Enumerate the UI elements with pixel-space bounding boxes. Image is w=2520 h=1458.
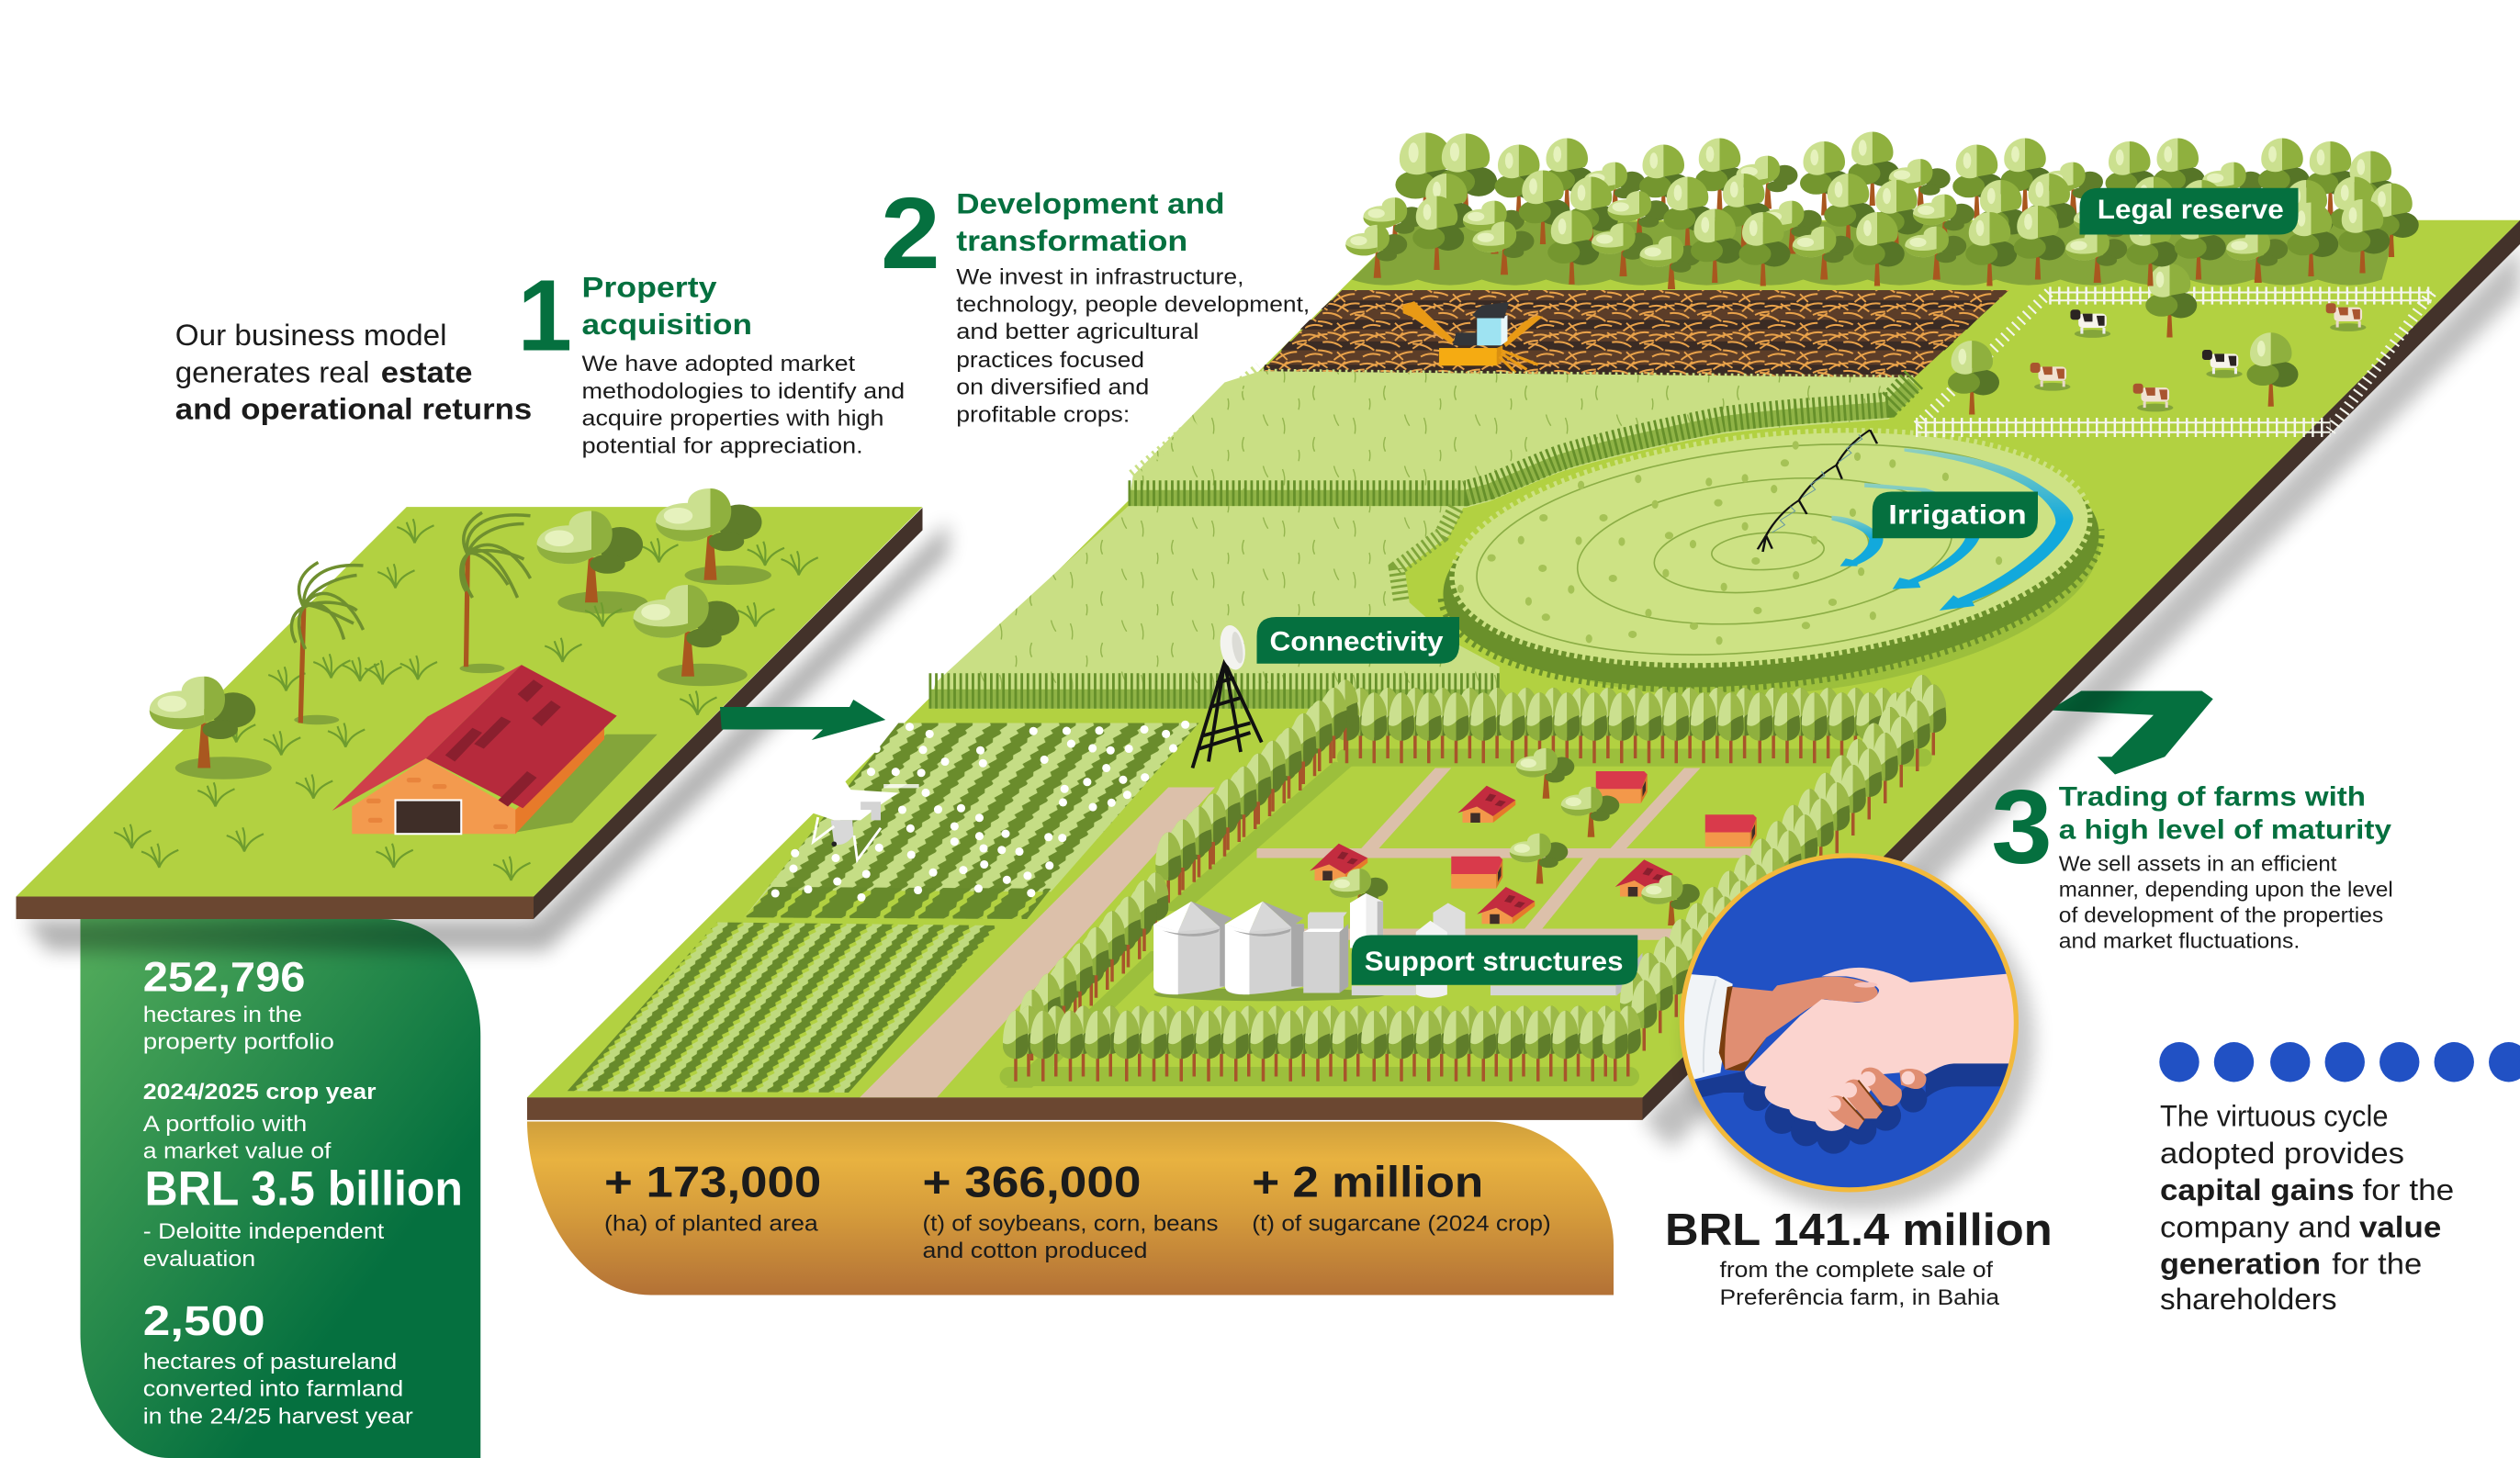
step 3 heading: Trading of farms with	[2059, 782, 2366, 813]
number 1: 1	[518, 259, 572, 372]
intro text: and operational returns	[175, 393, 532, 426]
left land plate: raw property	[17, 488, 949, 951]
virtuous cycle text: The virtuous cycle	[2160, 1100, 2388, 1133]
tree shadows	[175, 566, 771, 832]
main land plate	[527, 131, 2520, 1149]
circle surface	[1443, 404, 2099, 691]
plate soil edge	[17, 508, 923, 919]
elevator block	[1303, 912, 1348, 993]
irrigation flow arrows	[1831, 448, 2073, 611]
legal reserve forest	[1345, 131, 2419, 289]
upper cane field	[1129, 368, 1914, 508]
tag: connectivity	[1256, 617, 1459, 664]
stat: portfolio market value: 2024/2025 crop year	[143, 1080, 377, 1105]
cell tower with dish	[1193, 623, 1262, 768]
step 2: development and transformation	[881, 177, 1310, 427]
step 2 body: practices focused	[956, 349, 1144, 373]
silo A	[1153, 902, 1232, 994]
tag: legal reserve: Legal reserve	[2098, 195, 2284, 225]
stat: portfolio market value: BRL 3.5 billion	[145, 1161, 463, 1216]
leaves	[1457, 441, 2038, 645]
farm houses	[1310, 771, 1757, 924]
circle ground shadow	[1472, 420, 2111, 724]
number 3: 3	[1991, 769, 2053, 886]
stat: planted area: (ha) of planted area	[604, 1211, 818, 1236]
plate surface	[17, 507, 923, 896]
step 2 heading	[956, 187, 1225, 257]
step 1 body: acquire properties with high	[582, 408, 884, 432]
intro text: Our business model	[175, 319, 447, 352]
hedge shadows	[1000, 748, 1931, 1088]
step 1 heading: acquisition	[582, 308, 752, 341]
intro text: generates real	[175, 355, 370, 388]
tag: legal reserve	[2079, 188, 2298, 234]
tall silos	[1350, 893, 1642, 998]
stat: grain and cotton	[923, 1159, 1219, 1263]
stat: grain and cotton: and cotton produced	[923, 1239, 1148, 1263]
center pivot arm	[1758, 430, 1877, 552]
round trees	[150, 488, 762, 768]
stat: pastureland converted	[143, 1297, 413, 1429]
farm yard hedges	[1000, 679, 1931, 1088]
yard trees	[1330, 748, 1700, 925]
step 1: property acquisition	[518, 259, 905, 458]
lower and right hedges	[1003, 675, 1946, 1082]
stat: sugarcane	[1252, 1159, 1551, 1236]
harvester	[1402, 301, 1543, 373]
sale value callout	[1665, 1206, 2053, 1310]
sale value callout: Preferência farm, in Bahia	[1719, 1285, 1999, 1310]
plate soil edge	[527, 220, 2520, 1120]
step 3 body: and market fluctuations.	[2059, 928, 2300, 952]
stat: property portfolio: property portfolio	[143, 1030, 334, 1055]
shirt cuff	[1684, 974, 1733, 1080]
step 3: trading of farms	[1991, 769, 2393, 952]
field fringe	[929, 508, 1500, 699]
stat: grain and cotton: (t) of soybeans, corn, beans	[923, 1211, 1219, 1236]
intro text	[175, 319, 532, 426]
lower cane field	[929, 506, 1500, 709]
cotton bolls	[771, 721, 1189, 902]
stat: portfolio market value: A portfolio with	[143, 1112, 307, 1137]
step 1 heading	[582, 271, 752, 341]
tag: support structures: Support structures	[1365, 947, 1623, 977]
arrow to step 3	[2049, 690, 2213, 774]
darker hand	[1723, 977, 1878, 1071]
fingers	[1827, 1068, 1926, 1129]
step 2 heading: transformation	[956, 224, 1187, 257]
circle furrows	[1467, 419, 2069, 680]
farm road	[860, 787, 1215, 1097]
lighter hand	[1745, 968, 2020, 1131]
right hedge	[1620, 675, 1946, 1050]
intro text: estate	[381, 355, 473, 388]
stat: grain and cotton: + 366,000	[923, 1159, 1142, 1207]
internal roads	[1256, 768, 1760, 940]
stat: pastureland converted: in the 24/25 harvest year	[143, 1404, 413, 1429]
pasture trees	[1948, 264, 2298, 414]
handshake medallion	[1678, 856, 2034, 1211]
virtuous cycle text	[2160, 1100, 2454, 1316]
lower left hedge	[1019, 872, 1168, 1060]
step 1 heading: Property	[582, 271, 717, 304]
bottom hedge row	[1003, 1005, 1641, 1082]
number 2: 2	[881, 177, 940, 290]
plate surface	[527, 220, 2520, 1097]
stat: sugarcane: (t) of sugarcane (2024 crop)	[1252, 1211, 1551, 1236]
tag: support structures	[1352, 935, 1637, 985]
stat: pastureland converted: hectares of pastureland	[143, 1350, 397, 1374]
step 3 body: manner, depending upon the level	[2059, 877, 2393, 901]
virtuous cycle text: for the	[2362, 1173, 2454, 1206]
upper left hedge	[1155, 679, 1358, 903]
front fence	[1916, 422, 2330, 432]
step 1 body	[582, 353, 905, 458]
step 2 body: on diversified and	[956, 376, 1149, 400]
virtuous cycle text: generation	[2160, 1248, 2321, 1281]
step 2 body: and better agricultural	[956, 320, 1199, 344]
virtuous cycle text: adopted provides	[2160, 1137, 2404, 1170]
circle leaves and flow artwork	[1457, 430, 2073, 645]
cotton crop block	[744, 721, 1199, 919]
silo B	[1225, 902, 1304, 994]
tag: irrigation: Irrigation	[1888, 499, 2027, 530]
step 3 body: of development of the properties	[2059, 903, 2383, 926]
soybean crop block	[568, 922, 998, 1093]
back fence	[1916, 292, 2432, 431]
step 3 body: We sell assets in an efficient	[2059, 851, 2337, 875]
virtuous cycle text: shareholders	[2160, 1283, 2336, 1316]
tag: irrigation	[1873, 491, 2038, 538]
stat: portfolio market value: a market value of	[143, 1139, 332, 1164]
plowed field	[1262, 290, 2008, 377]
irrigated pivot circle	[1431, 404, 2113, 724]
stat: sugarcane: + 2 million	[1252, 1159, 1483, 1207]
sale value callout: from the complete sale of	[1719, 1258, 1993, 1283]
stat: property portfolio: hectares in the	[143, 1003, 302, 1027]
stat: property portfolio	[143, 954, 334, 1055]
stat: property portfolio: 252,796	[143, 954, 306, 1001]
stat: planted area	[604, 1159, 821, 1236]
top hedge row	[1333, 688, 1923, 763]
virtuous cycle text: capital gains	[2160, 1173, 2355, 1206]
blue dots row	[2159, 1042, 2520, 1082]
fenced pasture	[1916, 264, 2432, 432]
red roof barn	[332, 665, 617, 834]
step 2 body: technology, people development,	[956, 293, 1310, 317]
finger nails	[1827, 1071, 1915, 1112]
step 2 body: We invest in infrastructure,	[956, 266, 1244, 290]
dark row ends	[744, 890, 1052, 919]
virtuous cycle text: value	[2359, 1210, 2441, 1243]
step 2 body: profitable crops:	[956, 403, 1130, 427]
tag: connectivity: Connectivity	[1269, 627, 1444, 657]
virtuous cycle text: company and	[2160, 1210, 2351, 1243]
step 1 body: potential for appreciation.	[582, 434, 863, 458]
circle rim	[1431, 411, 2111, 717]
step 3 body	[2059, 851, 2393, 952]
step 3 heading: a high level of maturity	[2059, 814, 2392, 845]
green stats panel	[81, 919, 480, 1458]
palm trees	[292, 512, 531, 723]
cows	[2031, 303, 2366, 411]
grain silos	[1153, 893, 1642, 1001]
stat: portfolio market value	[143, 1080, 463, 1272]
virtuous cycle text: for the	[2332, 1248, 2422, 1281]
lower dark shadow	[1693, 1063, 2020, 1154]
grass tufts	[114, 519, 818, 880]
stat: planted area: + 173,000	[604, 1159, 821, 1207]
sale value callout: BRL 141.4 million	[1665, 1206, 2053, 1255]
stat: pastureland converted: 2,500	[143, 1297, 265, 1344]
step 1 body: We have adopted market	[582, 353, 855, 376]
step 2 body	[956, 266, 1310, 427]
gold production panel	[527, 1121, 1614, 1295]
stat: pastureland converted: converted into farmland	[143, 1377, 403, 1402]
step 3 heading	[2059, 782, 2392, 845]
step 1 body: methodologies to identify and	[582, 380, 905, 404]
stat: portfolio market value: evaluation	[143, 1247, 255, 1272]
field fringe	[1129, 368, 1914, 498]
drone	[798, 771, 919, 860]
step 2 heading: Development and	[956, 187, 1225, 220]
forest shade band	[1352, 221, 2398, 286]
arrow to main plate	[720, 700, 885, 740]
stat: portfolio market value: - Deloitte independent	[143, 1219, 384, 1244]
